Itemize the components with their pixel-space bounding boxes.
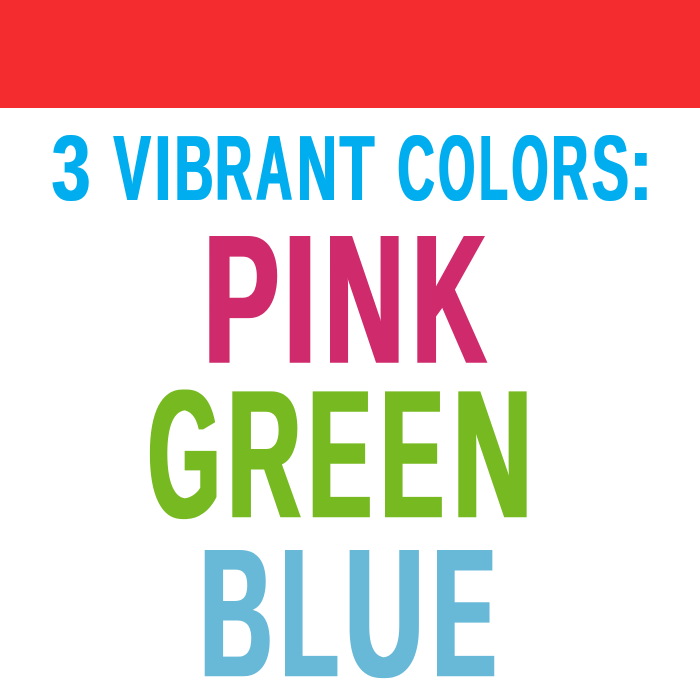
color word: blue [200,510,496,700]
color word: green: R [228,353,301,557]
heading: 3 vibrant colors: S [592,117,629,221]
heading: 3 vibrant colors: A [256,115,292,220]
color word: pink [204,196,486,403]
red top banner [0,0,700,108]
color word: green [148,351,532,557]
heading: 3 vibrant colors: : [629,117,652,220]
color word: pink: P [204,198,279,402]
color word: green: E [308,352,372,556]
heading: 3 vibrant colors: V [114,117,151,221]
heading: 3 vibrant colors: B [175,117,213,221]
heading: 3 vibrant colors: L [479,115,508,220]
heading: 3 vibrant colors: R [552,116,588,220]
heading: 3 vibrant colors: O [438,115,475,220]
heading: 3 vibrant colors: N [297,117,337,221]
color word: pink: K [412,196,486,402]
heading: 3 vibrant colors: T [340,116,374,221]
heading: 3 vibrant colors: I [155,117,171,220]
color word: pink: I [284,196,316,402]
heading: 3 vibrant colors: R [215,116,252,220]
heading: 3 vibrant colors: C [398,116,435,220]
color word: green: G [148,352,220,556]
heading: 3 vibrant colors [52,115,652,221]
heading: 3 vibrant colors: 3 [52,117,90,220]
color word: green: E [381,351,444,556]
heading: 3 vibrant colors: O [512,115,548,220]
color word: green: N [453,351,532,556]
color word: pink: N [325,198,404,403]
